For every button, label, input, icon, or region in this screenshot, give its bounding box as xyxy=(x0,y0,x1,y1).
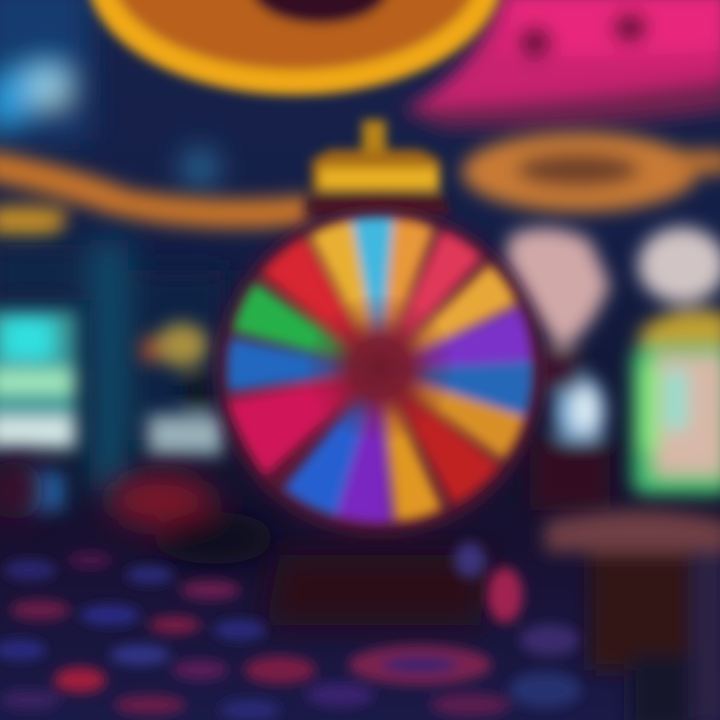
panel: magenta ceiling upper right xyxy=(400,0,720,129)
slot machine: right xyxy=(632,227,720,495)
slot machine: middle xyxy=(140,323,223,455)
ceiling band: left orange xyxy=(0,150,310,238)
ceiling ring: top orange xyxy=(87,0,503,95)
red seats xyxy=(0,460,275,564)
crown on wheel xyxy=(305,120,450,215)
wheel segments xyxy=(225,215,536,525)
ceiling ring: right orange xyxy=(462,132,720,212)
carpet xyxy=(0,542,581,720)
wheel rim xyxy=(218,210,542,534)
slot machine: left xyxy=(0,310,77,510)
figure: right upper white xyxy=(505,228,610,510)
wheel hub xyxy=(285,273,475,463)
wheel xyxy=(218,210,542,534)
table right foreground xyxy=(545,510,720,720)
wheel stand xyxy=(265,555,490,625)
upper left blue glow xyxy=(0,0,218,188)
left pillars xyxy=(0,240,225,490)
